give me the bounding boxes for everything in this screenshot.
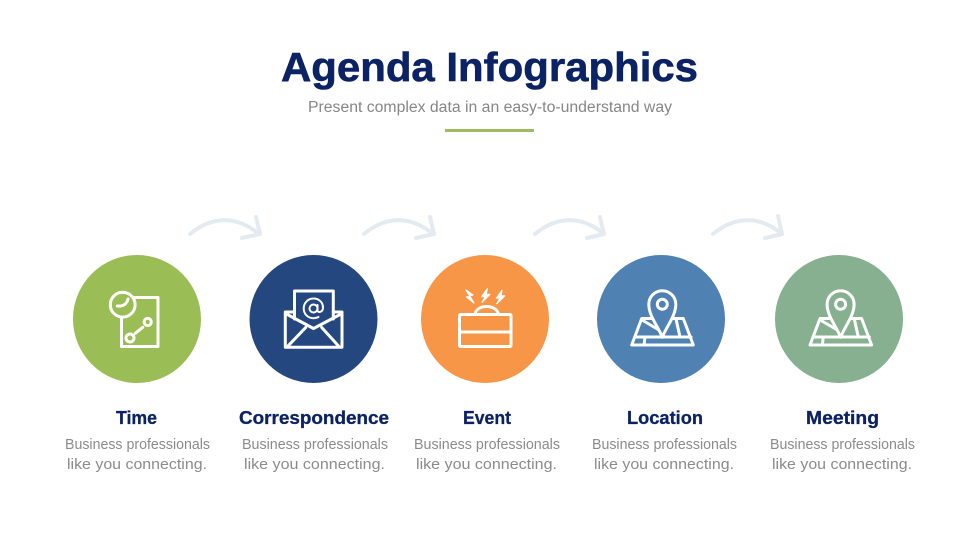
label: time: Time xyxy=(116,407,157,428)
description: event: like you connecting. xyxy=(416,456,557,473)
circle: correspondence xyxy=(250,255,378,383)
description: correspondence: like you connecting. xyxy=(244,456,385,473)
description: event: Business professionals xyxy=(414,436,560,453)
label: location: Location xyxy=(627,407,703,428)
label: event: Event xyxy=(463,407,511,428)
label: meeting: Meeting xyxy=(806,407,879,428)
icon: briefcase with lightning xyxy=(460,289,511,346)
step: meeting xyxy=(770,255,915,473)
description: location: Business professionals xyxy=(592,436,737,453)
label: correspondence: Correspondence xyxy=(239,407,389,428)
circle: event xyxy=(421,255,549,383)
step: time xyxy=(65,255,210,473)
circle: location xyxy=(597,255,725,383)
icon: clock and route document xyxy=(110,292,158,346)
arrow: location to meeting xyxy=(713,216,782,238)
arrow: event to location xyxy=(535,217,604,238)
step: correspondence xyxy=(239,255,389,473)
description: correspondence: Business professionals xyxy=(242,436,388,453)
title: Agenda Infographics xyxy=(281,44,698,90)
description: time: like you connecting. xyxy=(67,456,207,473)
arrow: time to correspondence xyxy=(190,217,260,238)
description: meeting: like you connecting. xyxy=(772,456,912,473)
description: location: like you connecting. xyxy=(594,456,734,473)
icon: map pin on map xyxy=(632,291,693,345)
circle: meeting xyxy=(775,255,903,383)
subtitle: Present complex data in an easy-to-understand way xyxy=(308,99,672,116)
circle: time xyxy=(73,255,201,383)
description: meeting: Business professionals xyxy=(770,436,915,453)
accent line xyxy=(445,129,534,132)
icon: meeting map pin xyxy=(810,291,872,345)
icon: envelope with at sign xyxy=(285,291,342,347)
description: time: Business professionals xyxy=(65,436,210,453)
step: location xyxy=(592,255,737,473)
step: event xyxy=(414,255,560,473)
arrow: correspondence to event xyxy=(364,217,434,238)
